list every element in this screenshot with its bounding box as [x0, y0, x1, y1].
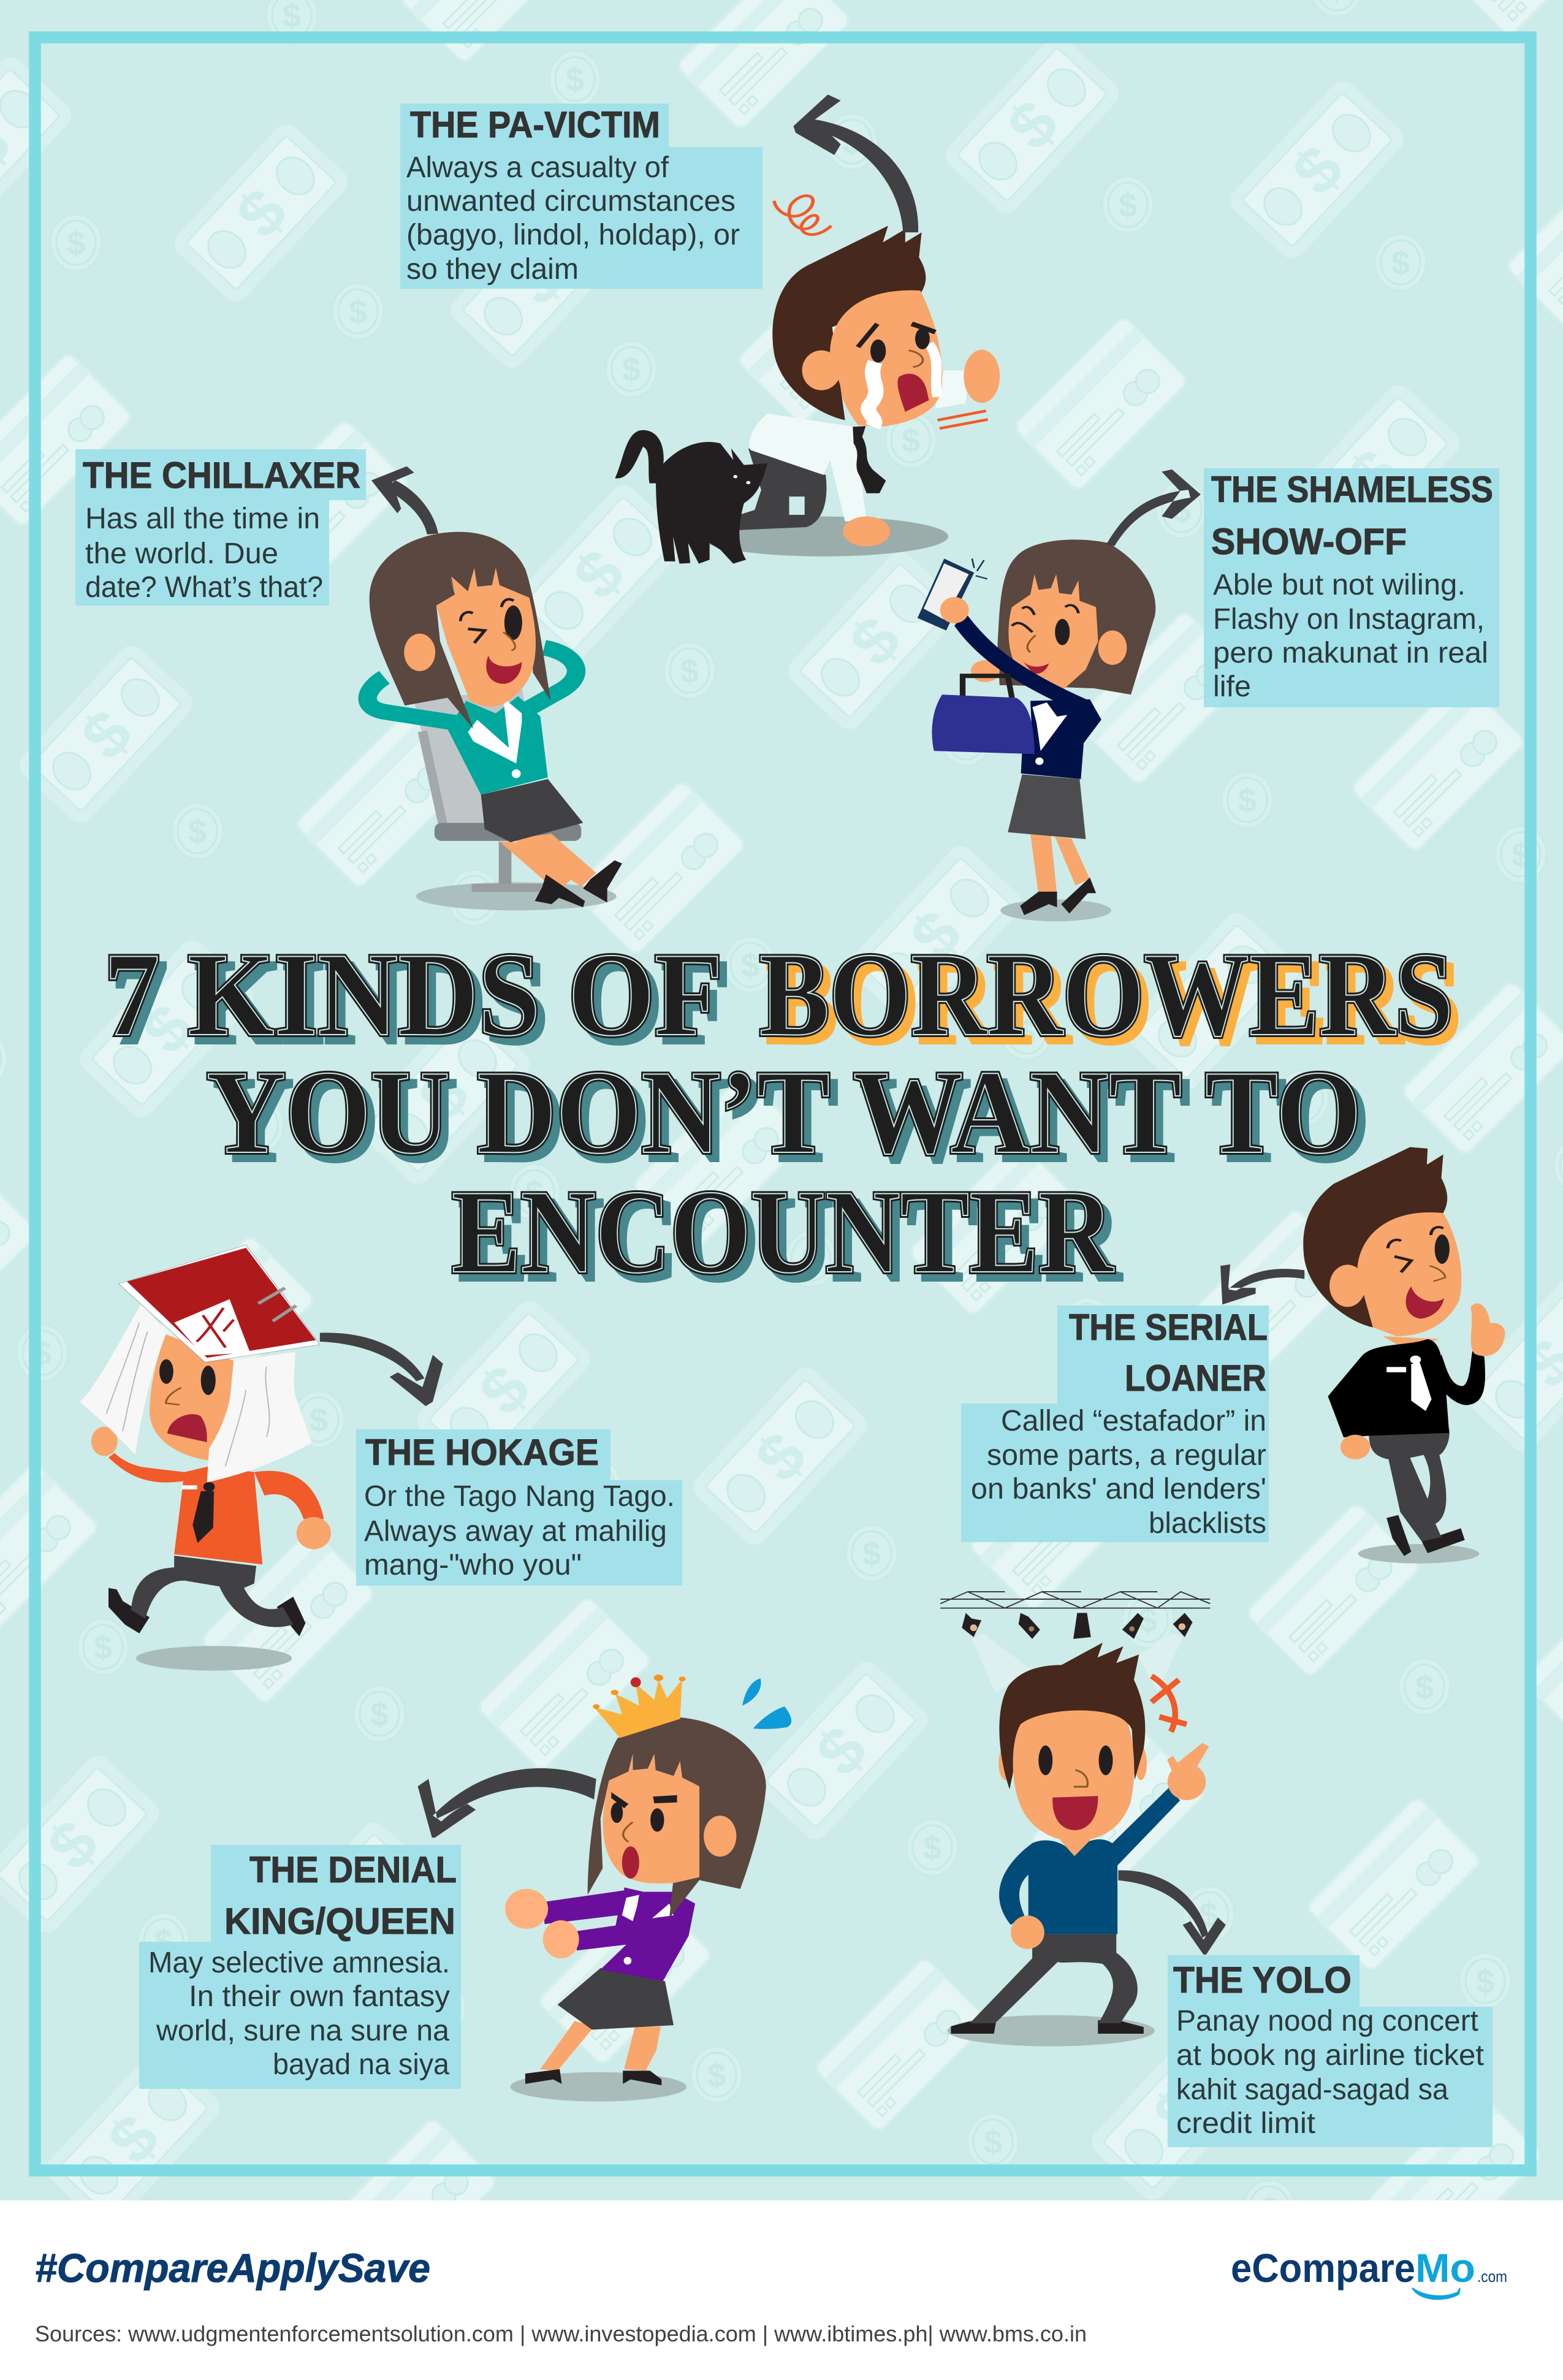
text block: blacklists — [1149, 1507, 1266, 1540]
heading: THE PA-VICTIM — [410, 104, 660, 145]
arrow — [793, 94, 918, 232]
character: man pointing up under stage lights — [940, 1592, 1210, 2047]
character: running man hiding under folder and towel — [80, 1245, 331, 1671]
footer — [0, 2200, 1563, 2380]
text block — [148, 1947, 450, 2081]
text block: unwanted circumstances — [406, 185, 736, 218]
text block — [406, 151, 740, 286]
title inline highlight: 7 KINDS OF — [104, 929, 723, 1061]
text block — [971, 1405, 1266, 1540]
title text: YOU DON’T WANT TO — [207, 1046, 1361, 1179]
panel: the pa-victim — [400, 94, 1000, 564]
heading — [1069, 1307, 1268, 1399]
arrow — [1106, 470, 1201, 546]
text block: Always away at mahilig — [364, 1515, 667, 1548]
text block: at book ng airline ticket — [1176, 2039, 1484, 2072]
title inline highlight: ENCOUNTER — [452, 1166, 1114, 1298]
title text: 7 KINDS OF — [104, 929, 723, 1061]
text block: mang-"who you" — [364, 1549, 582, 1581]
heading: THE SHAMELESS — [1211, 469, 1493, 510]
heading: THE SERIAL — [1069, 1307, 1268, 1348]
title shadow: YOU DON’T WANT TO — [214, 1054, 1369, 1186]
text block: kahit sagad-sagad sa — [1176, 2074, 1448, 2106]
text block — [364, 1480, 675, 1581]
label background — [400, 104, 762, 289]
arrow — [1220, 1264, 1304, 1304]
text block: some parts, a regular — [987, 1439, 1266, 1472]
label background — [1204, 468, 1499, 707]
text block: Panay nood ng concert — [1176, 2005, 1478, 2037]
logo: eCompareMo: .com — [1477, 2267, 1507, 2286]
heading: SHOW-OFF — [1211, 521, 1407, 562]
title text — [104, 929, 1453, 1298]
sources: Sources: www.udgmentenforcementsolution.com | www.investopedia.com | www.ibtimes.ph| www.bms.co.in — [35, 2321, 1087, 2346]
character: winking man with thumbs up — [1303, 1147, 1505, 1564]
label background — [1168, 1955, 1493, 2147]
heading: KING/QUEEN — [224, 1901, 455, 1942]
text block — [85, 503, 323, 604]
text block: May selective amnesia. — [148, 1947, 450, 1979]
text block: the world. Due — [85, 538, 278, 570]
arrow — [371, 466, 438, 534]
text block: Or the Tago Nang Tago. — [364, 1480, 675, 1513]
title shadow: ENCOUNTER — [459, 1173, 1122, 1306]
label background — [75, 449, 366, 606]
text block: Flashy on Instagram, — [1213, 603, 1485, 636]
arrow — [1118, 1870, 1226, 1955]
heading: THE CHILLAXER — [83, 455, 360, 496]
logo: eCompareMo — [1231, 2245, 1507, 2299]
text block: Always a casualty of — [406, 151, 669, 184]
title shadow: 7 KINDS OF — [112, 936, 730, 1068]
panel: the shameless show-off — [918, 468, 1499, 921]
text block — [1213, 569, 1488, 703]
label background — [356, 1429, 682, 1586]
title text: BORROWERS — [759, 929, 1453, 1061]
text block: life — [1213, 671, 1251, 703]
text block: date? What’s that? — [85, 571, 323, 604]
text block: Has all the time in — [85, 503, 320, 535]
logo: eCompareMo: Mo — [1415, 2245, 1475, 2291]
text block: on banks' and lenders' — [971, 1473, 1266, 1505]
logo: eCompareMo: eCompare — [1231, 2245, 1415, 2291]
text block: (bagyo, lindol, holdap), or — [406, 219, 740, 251]
arrow — [418, 1768, 596, 1838]
text block: bayad na siya — [273, 2048, 449, 2081]
text block: so they claim — [406, 253, 579, 286]
panel: the serial loaner — [961, 1147, 1505, 1564]
title inline highlight: BORROWERS — [759, 929, 1453, 1061]
title inline highlight — [104, 929, 1453, 1298]
title text: ENCOUNTER — [452, 1166, 1114, 1298]
hashtag: #CompareApplySave — [35, 2245, 430, 2291]
heading: THE HOKAGE — [365, 1432, 599, 1473]
text block: Able but not wiling. — [1213, 569, 1466, 601]
arrow — [320, 1333, 443, 1406]
title shadow — [112, 936, 1461, 1306]
panel: the hokage — [80, 1245, 682, 1671]
character: crying man with black cat — [615, 196, 1000, 564]
heading — [224, 1849, 457, 1942]
text block: Called “estafador” in — [1001, 1405, 1266, 1437]
heading: LOANER — [1125, 1358, 1266, 1399]
panel: the yolo — [940, 1592, 1493, 2147]
panel: the denial king/queen — [139, 1675, 791, 2102]
character: woman taking a selfie with blue bag — [918, 539, 1155, 921]
title shadow: BORROWERS — [767, 936, 1461, 1068]
text block: pero makunat in real — [1213, 637, 1488, 669]
text block: world, sure na sure na — [156, 2015, 449, 2047]
heading: THE YOLO — [1173, 1960, 1352, 2001]
character: woman relaxing on office chair — [368, 532, 622, 910]
panel: the chillaxer — [75, 449, 622, 910]
heading — [1211, 469, 1493, 562]
label background — [961, 1306, 1269, 1542]
text block — [1176, 2005, 1484, 2140]
title inline highlight: YOU DON’T WANT TO — [207, 1046, 1361, 1179]
text block: credit limit — [1176, 2107, 1315, 2140]
text block: In their own fantasy — [189, 1980, 450, 2013]
character: woman with crown pushing away — [505, 1675, 791, 2102]
title — [104, 929, 1461, 1306]
heading: THE DENIAL — [249, 1849, 457, 1890]
label background — [139, 1845, 461, 2089]
